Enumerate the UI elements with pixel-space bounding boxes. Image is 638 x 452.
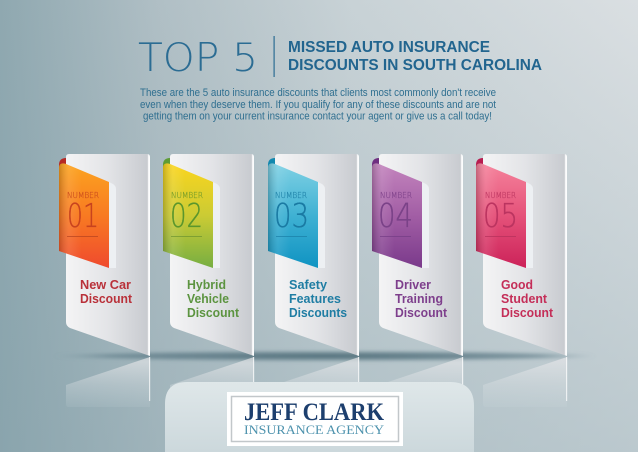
- card 5: Good Student Discount: Discount: [501, 305, 554, 320]
- intro paragraph: These are the 5 auto insurance discounts that clients most commonly don't receive: [140, 87, 496, 99]
- card 4: Driver Training Discount: Driver: [395, 277, 431, 292]
- card 5: Good Student Discount: NUMBER: [485, 191, 516, 200]
- heading: DISCOUNTS IN SOUTH CAROLINA: [288, 57, 542, 74]
- card 5: Good Student Discount: Good: [501, 277, 533, 292]
- card 3: Safety Features Discounts: NUMBER: [275, 191, 307, 200]
- card 1: New Car Discount: NUMBER: [67, 191, 99, 200]
- card 2: Hybrid Vehicle Discount: [163, 154, 254, 356]
- card 4: Driver Training Discount: NUMBER: [380, 191, 412, 200]
- card reflections: [66, 357, 567, 407]
- floor shadow: [53, 351, 597, 361]
- card 3: Safety Features Discounts: [268, 154, 359, 356]
- card 2: Hybrid Vehicle Discount: NUMBER: [171, 191, 203, 200]
- card 1: New Car Discount: New Car: [80, 277, 131, 292]
- card 3: Safety Features Discounts: Discounts: [289, 305, 347, 320]
- heading: [288, 39, 542, 74]
- card 2: Hybrid Vehicle Discount: Hybrid: [187, 277, 226, 292]
- intro paragraph: getting them on your current insurance contact your agent or give us a call today!: [143, 110, 492, 122]
- title divider: [274, 36, 275, 77]
- card 3: Safety Features Discounts: Safety: [289, 277, 328, 292]
- card 4: Driver Training Discount: Training: [395, 291, 443, 306]
- logo: Jeff Clark Insurance Agency: JEFF CLARK: [244, 399, 384, 426]
- card 1: New Car Discount: 01: [67, 196, 99, 235]
- title: Top 5: TOP 5: [138, 36, 258, 81]
- logo: Jeff Clark Insurance Agency: INSURANCE AGENCY: [244, 422, 385, 437]
- card 3: Safety Features Discounts: Features: [289, 291, 341, 306]
- card 5: Good Student Discount: Student: [501, 291, 548, 306]
- logo: Jeff Clark Insurance Agency: [227, 392, 403, 446]
- card 4: Driver Training Discount: [372, 154, 463, 356]
- bottom logo panel: [165, 382, 474, 452]
- intro paragraph: [140, 87, 497, 122]
- card 4: Driver Training Discount: 04: [378, 196, 413, 235]
- card 2: Hybrid Vehicle Discount: Discount: [187, 305, 240, 320]
- card 4: Driver Training Discount: Discount: [395, 305, 448, 320]
- card 5: Good Student Discount: 05: [483, 196, 518, 235]
- card 1: New Car Discount: Discount: [80, 291, 133, 306]
- card 3: Safety Features Discounts: 03: [274, 196, 309, 235]
- heading: MISSED AUTO INSURANCE: [288, 39, 490, 56]
- card 2: Hybrid Vehicle Discount: 02: [170, 196, 203, 235]
- intro paragraph: even when they deserve them. If you qualify for any of these discounts and are not: [140, 99, 497, 111]
- card 1: New Car Discount: [59, 154, 150, 356]
- card 2: Hybrid Vehicle Discount: Vehicle: [187, 291, 229, 306]
- card 5: Good Student Discount: [476, 154, 567, 356]
